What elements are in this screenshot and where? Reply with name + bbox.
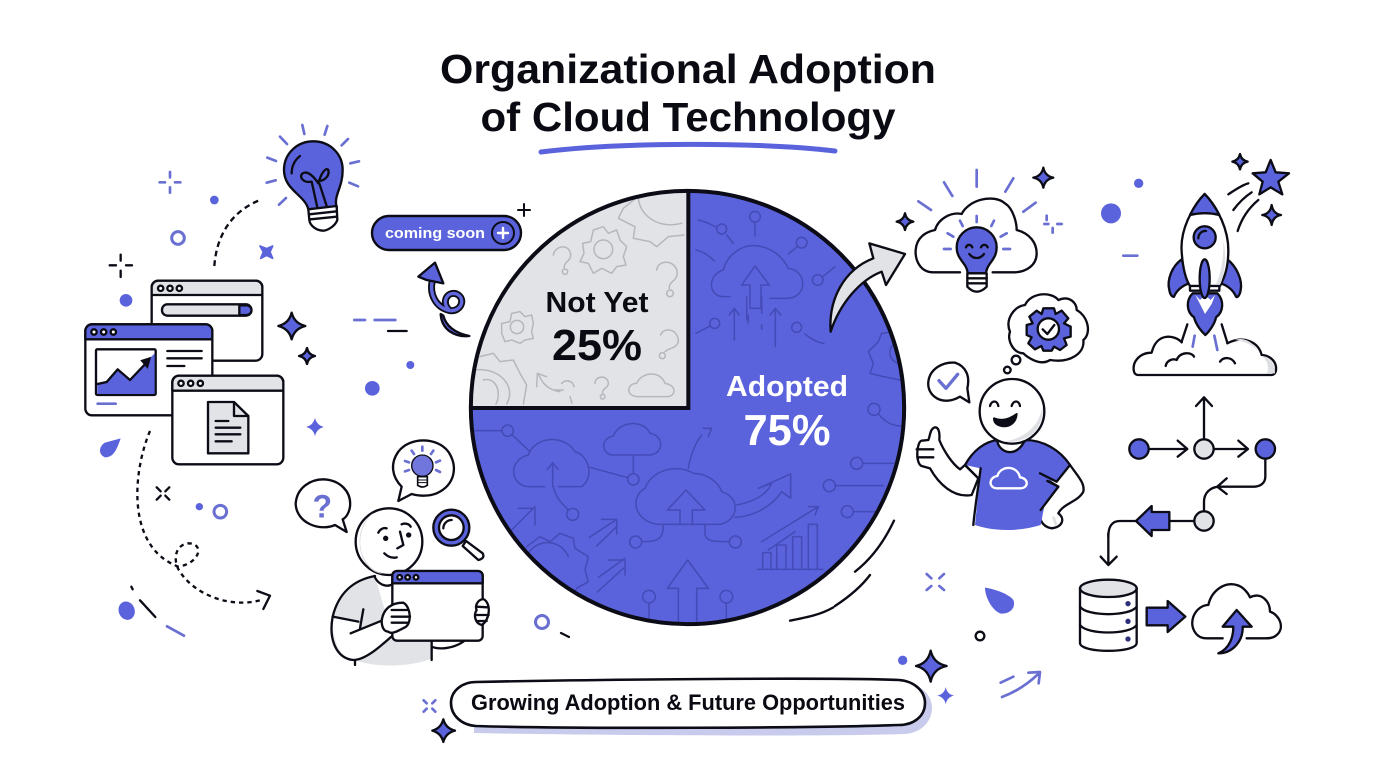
label: not yet 25%: 25% <box>552 321 642 370</box>
idea bubble <box>393 440 454 501</box>
stars near rocket <box>1232 154 1289 225</box>
label: not yet 25%: Not Yet <box>546 287 649 319</box>
gear thought bubble <box>1004 294 1088 373</box>
smoke cloud <box>1134 337 1276 375</box>
right group: idea cloud and bubbles <box>897 154 1289 537</box>
slice: not yet 25% <box>471 191 688 407</box>
dashed looping arrow <box>137 431 270 609</box>
loop arrow below pill <box>418 263 469 336</box>
ring and dash below pie <box>536 616 569 637</box>
magnifier <box>433 510 483 560</box>
pattern: adopted icons <box>475 211 902 623</box>
icon: cloud with bulb <box>916 170 1062 292</box>
lower-left decorations <box>116 431 483 742</box>
decorations: left cluster <box>100 172 414 457</box>
window: chart <box>85 324 212 415</box>
hands <box>382 599 489 633</box>
body <box>333 576 432 665</box>
window: search <box>152 281 262 361</box>
pattern: not yet icons <box>473 193 684 404</box>
curved arrow out of pie <box>830 243 905 332</box>
title <box>440 46 936 152</box>
speed lines <box>1228 183 1258 231</box>
fins <box>1169 259 1189 297</box>
title: of Cloud Technology <box>480 94 896 140</box>
bottom caption pill <box>451 679 932 736</box>
slice: adopted 75% <box>471 191 904 624</box>
happy person <box>917 379 1084 530</box>
flow arrow to database <box>1101 533 1117 565</box>
motion lines under pie <box>790 521 894 621</box>
left arm thumbs up <box>917 427 978 495</box>
coming soon pill: coming soon <box>385 225 485 242</box>
flow diagram <box>1108 397 1275 537</box>
pie chart <box>471 191 904 624</box>
icon: upload cloud <box>1192 584 1281 653</box>
cloud logo <box>991 468 1027 488</box>
sparkles near cloud <box>897 168 1053 230</box>
window: document <box>172 376 283 464</box>
icon: rocket launch <box>1134 183 1276 375</box>
left group: browser windows and decorations <box>85 125 414 464</box>
small marks <box>116 487 455 742</box>
head <box>980 379 1044 444</box>
decorations near bottom right <box>898 574 1040 704</box>
check speech bubble <box>928 363 969 402</box>
bottom caption pill: Growing Adoption & Future Opportunities <box>471 690 905 715</box>
body <box>1182 194 1228 286</box>
tablet <box>392 571 483 641</box>
label: adopted 75%: 75% <box>744 406 830 455</box>
flame <box>1188 293 1222 335</box>
question bubble <box>296 479 350 532</box>
dots near rocket <box>1101 179 1143 256</box>
dashed path from windows to bulb <box>214 199 262 266</box>
arrow: database to cloud <box>1147 601 1185 632</box>
coming soon pill <box>372 204 530 250</box>
title: Organizational Adoption <box>440 46 936 92</box>
head <box>356 508 422 586</box>
exhaust lines <box>1182 324 1227 343</box>
label: not yet 25% <box>546 287 649 370</box>
shirt <box>965 440 1070 530</box>
icon: database <box>1080 580 1137 651</box>
right arm <box>1040 465 1084 528</box>
pie outline and dividers <box>471 191 904 624</box>
question bubble: ? <box>313 489 332 525</box>
person with tablet <box>332 508 489 665</box>
lower right icons <box>898 533 1281 704</box>
label: adopted 75% <box>726 371 848 455</box>
icon: light bulb <box>284 141 343 231</box>
rays of bulb <box>267 125 359 205</box>
label: adopted 75%: Adopted <box>726 371 848 403</box>
